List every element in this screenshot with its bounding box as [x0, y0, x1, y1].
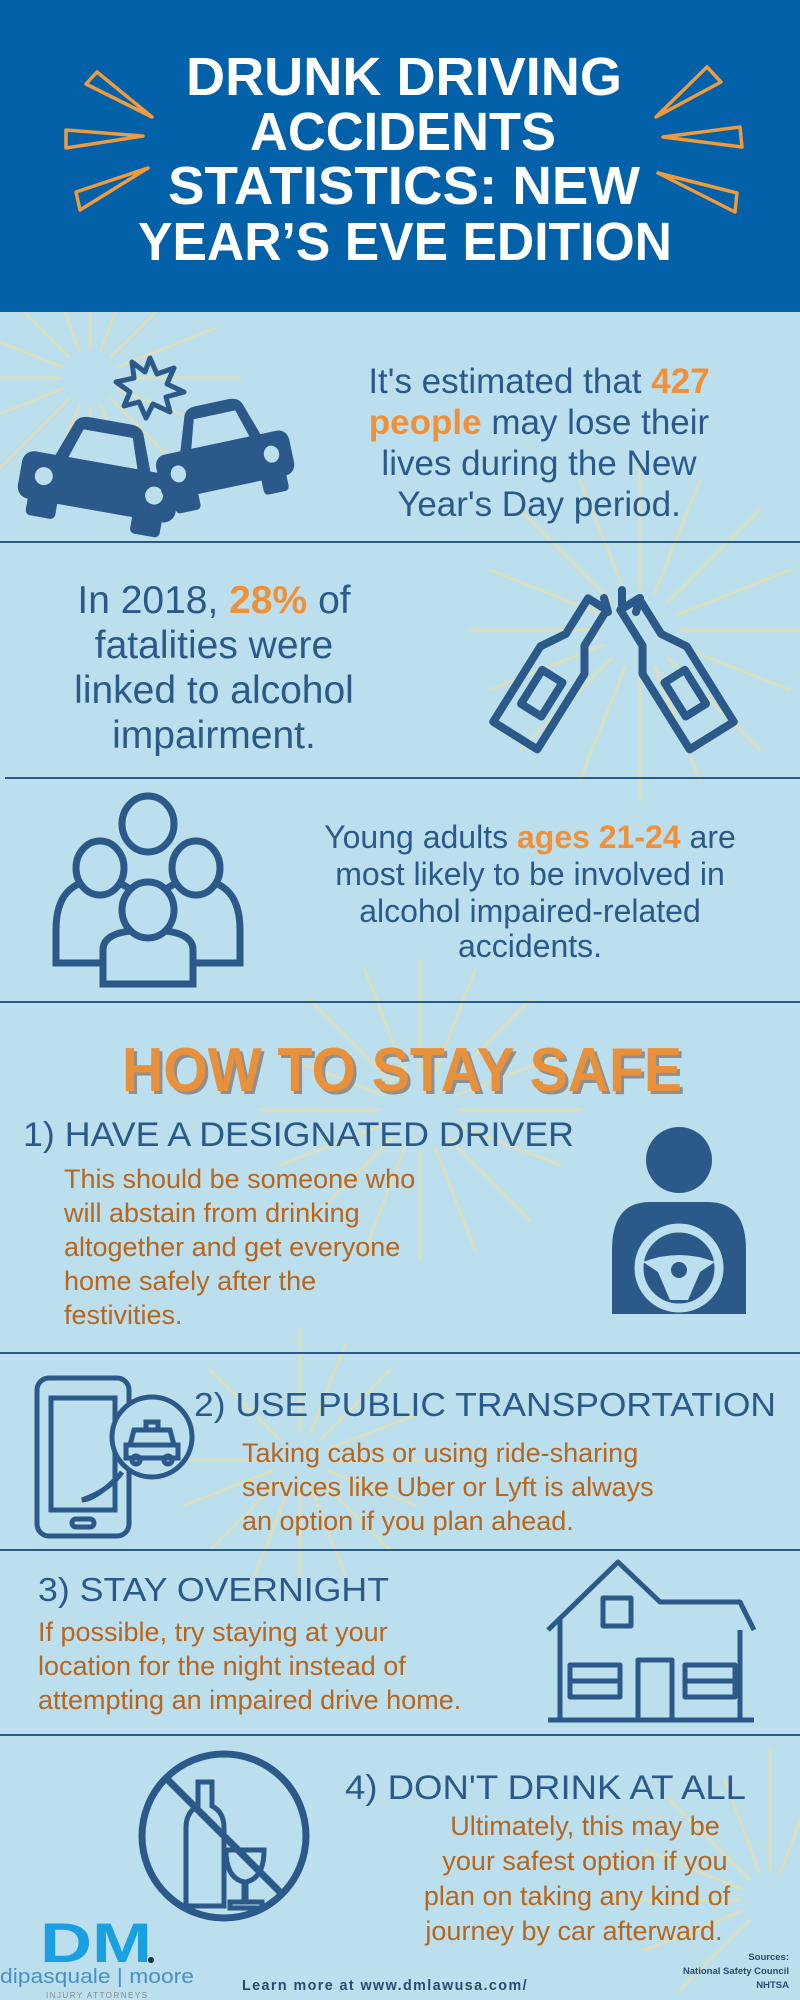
- title: [138, 47, 672, 272]
- footer: logo: dipasquale | moore: [0, 1966, 194, 1988]
- footer: sources: [683, 1952, 789, 1991]
- stat text 2: In 2018, 28% of: [77, 579, 351, 622]
- header banner: [0, 0, 800, 312]
- tip 4: don't drink: your safest option if you: [442, 1846, 728, 1876]
- stat text 2: impairment.: [112, 714, 316, 757]
- heading: how to stay safe: HOW TO STAY SAFE: [122, 1036, 682, 1105]
- footer: sources: NHTSA: [756, 1980, 789, 1991]
- panel: young adults stat: [56, 796, 736, 984]
- tip 4: don't drink: Ultimately, this may be: [450, 1811, 720, 1841]
- stat text 2: linked to alcohol: [74, 669, 354, 712]
- icon: house: [548, 1562, 754, 1720]
- footer: logo: [0, 1911, 194, 2000]
- tip 1: designated driver: festivities.: [64, 1300, 183, 1330]
- title: DRUNK DRIVING: [186, 47, 622, 107]
- stat text 1: [368, 362, 710, 524]
- footer: website: Learn more at www.dmlawusa.com/: [242, 1977, 528, 1994]
- stat text 1: lives during the New: [381, 444, 697, 483]
- tip 3: stay overnight: attempting an impaired drive home.: [38, 1685, 461, 1715]
- stat text 2: fatalities were: [95, 624, 333, 667]
- icon: phone with taxi bubble: [37, 1378, 192, 1536]
- stat text 3: Young adults ages 21-24 are: [324, 819, 736, 855]
- panel: 28% stat: [74, 579, 734, 757]
- icon: driver: [612, 1127, 746, 1314]
- tip 1: designated driver: 1) HAVE A DESIGNATED DRIVER: [23, 1116, 574, 1154]
- tip 4: don't drink: journey by car afterward.: [424, 1916, 723, 1946]
- tip 2: public transportation: an option if you plan ahead.: [242, 1506, 574, 1536]
- title: ACCIDENTS: [250, 102, 556, 162]
- tip 3: stay overnight: location for the night instead of: [38, 1651, 406, 1681]
- footer: sources: Sources:: [748, 1952, 789, 1963]
- title: STATISTICS: NEW: [168, 156, 640, 216]
- tip 4: don't drink: plan on taking any kind of: [424, 1881, 731, 1911]
- icon: clinking bottles: [493, 590, 734, 749]
- stat text 2: [74, 579, 354, 757]
- footer: logo: INJURY ATTORNEYS: [46, 1991, 149, 2000]
- title: YEAR’S EVE EDITION: [138, 212, 672, 272]
- icon: group of people: [56, 796, 240, 984]
- stat text 1: It's estimated that 427: [368, 362, 710, 401]
- tip 1: designated driver: home safely after the: [64, 1266, 316, 1296]
- stat text 3: alcohol impaired-related: [359, 893, 701, 929]
- stat text 3: [324, 819, 736, 964]
- tip 3: stay overnight: If possible, try staying at your: [38, 1617, 388, 1647]
- panel: 427 people stat: [13, 358, 710, 540]
- stat text 3: accidents.: [458, 928, 602, 964]
- tip 1: designated driver: altogether and get everyone: [64, 1232, 400, 1262]
- icon: car crash: [13, 358, 300, 540]
- tip 4: don't drink: [142, 1754, 746, 1946]
- stat text 3: most likely to be involved in: [335, 856, 725, 892]
- tip 1: designated driver: [23, 1116, 746, 1330]
- tip 3: stay overnight: [38, 1562, 754, 1720]
- heading: how to stay safe: HOW TO STAY SAFE: [125, 1039, 685, 1108]
- tip 2: public transportation: services like Uber or Lyft is always: [242, 1472, 654, 1502]
- footer: logo: DM: [40, 1911, 152, 1974]
- footer: sources: National Safety Council: [683, 1966, 789, 1977]
- tip 3: stay overnight: 3) STAY OVERNIGHT: [38, 1571, 389, 1608]
- decorative orange bursts: [66, 67, 742, 212]
- icon: no drinking: [142, 1754, 306, 1918]
- stat text 1: Year's Day period.: [397, 485, 681, 524]
- tip 2: public transportation: Taking cabs or using ride-sharing: [242, 1438, 638, 1468]
- tip 2: public transportation: [37, 1378, 776, 1536]
- tip 1: designated driver: will abstain from drinking: [63, 1198, 360, 1228]
- stat text 1: people may lose their: [369, 403, 710, 442]
- tip 4: don't drink: 4) DON'T DRINK AT ALL: [345, 1769, 746, 1807]
- tip 2: public transportation: 2) USE PUBLIC TRANSPORTATION: [194, 1386, 776, 1423]
- tip 1: designated driver: This should be someone who: [64, 1164, 415, 1194]
